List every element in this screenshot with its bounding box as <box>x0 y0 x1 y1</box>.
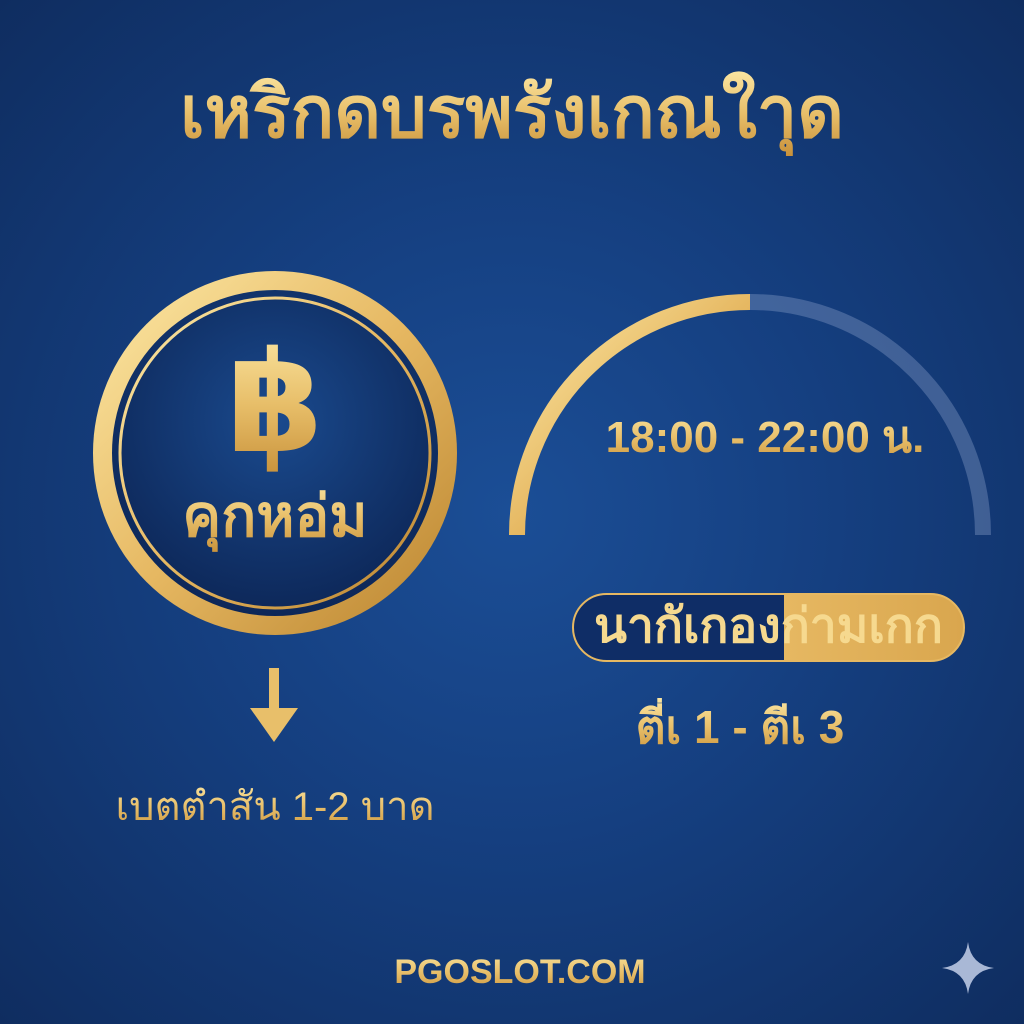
min bet text <box>70 782 480 832</box>
time text: 18:00 - 22:00 น. <box>606 413 924 462</box>
coin label <box>90 480 460 554</box>
arrow <box>250 668 298 742</box>
pill badge <box>572 593 965 662</box>
min bet text: เบตตำสัน 1-2 บาด <box>115 785 435 829</box>
days text <box>570 698 910 756</box>
coin <box>93 271 457 635</box>
days text: ตี่เ 1 - ตีเ 3 <box>636 701 844 753</box>
footer: PGOSLOT.COM <box>394 953 646 991</box>
title: เหริกดบรพรังเกณใาุด <box>180 73 844 153</box>
title <box>0 70 1024 156</box>
time arc <box>509 294 991 535</box>
coin label: คุกหอ่ม <box>182 484 368 549</box>
time text <box>550 410 980 466</box>
icon: sparkle <box>942 942 994 994</box>
icon: baht: ฿ <box>226 324 324 481</box>
pill badge: นากัเกองก่ามเกก <box>594 600 943 653</box>
icon: baht <box>90 328 460 478</box>
footer <box>0 950 1024 994</box>
